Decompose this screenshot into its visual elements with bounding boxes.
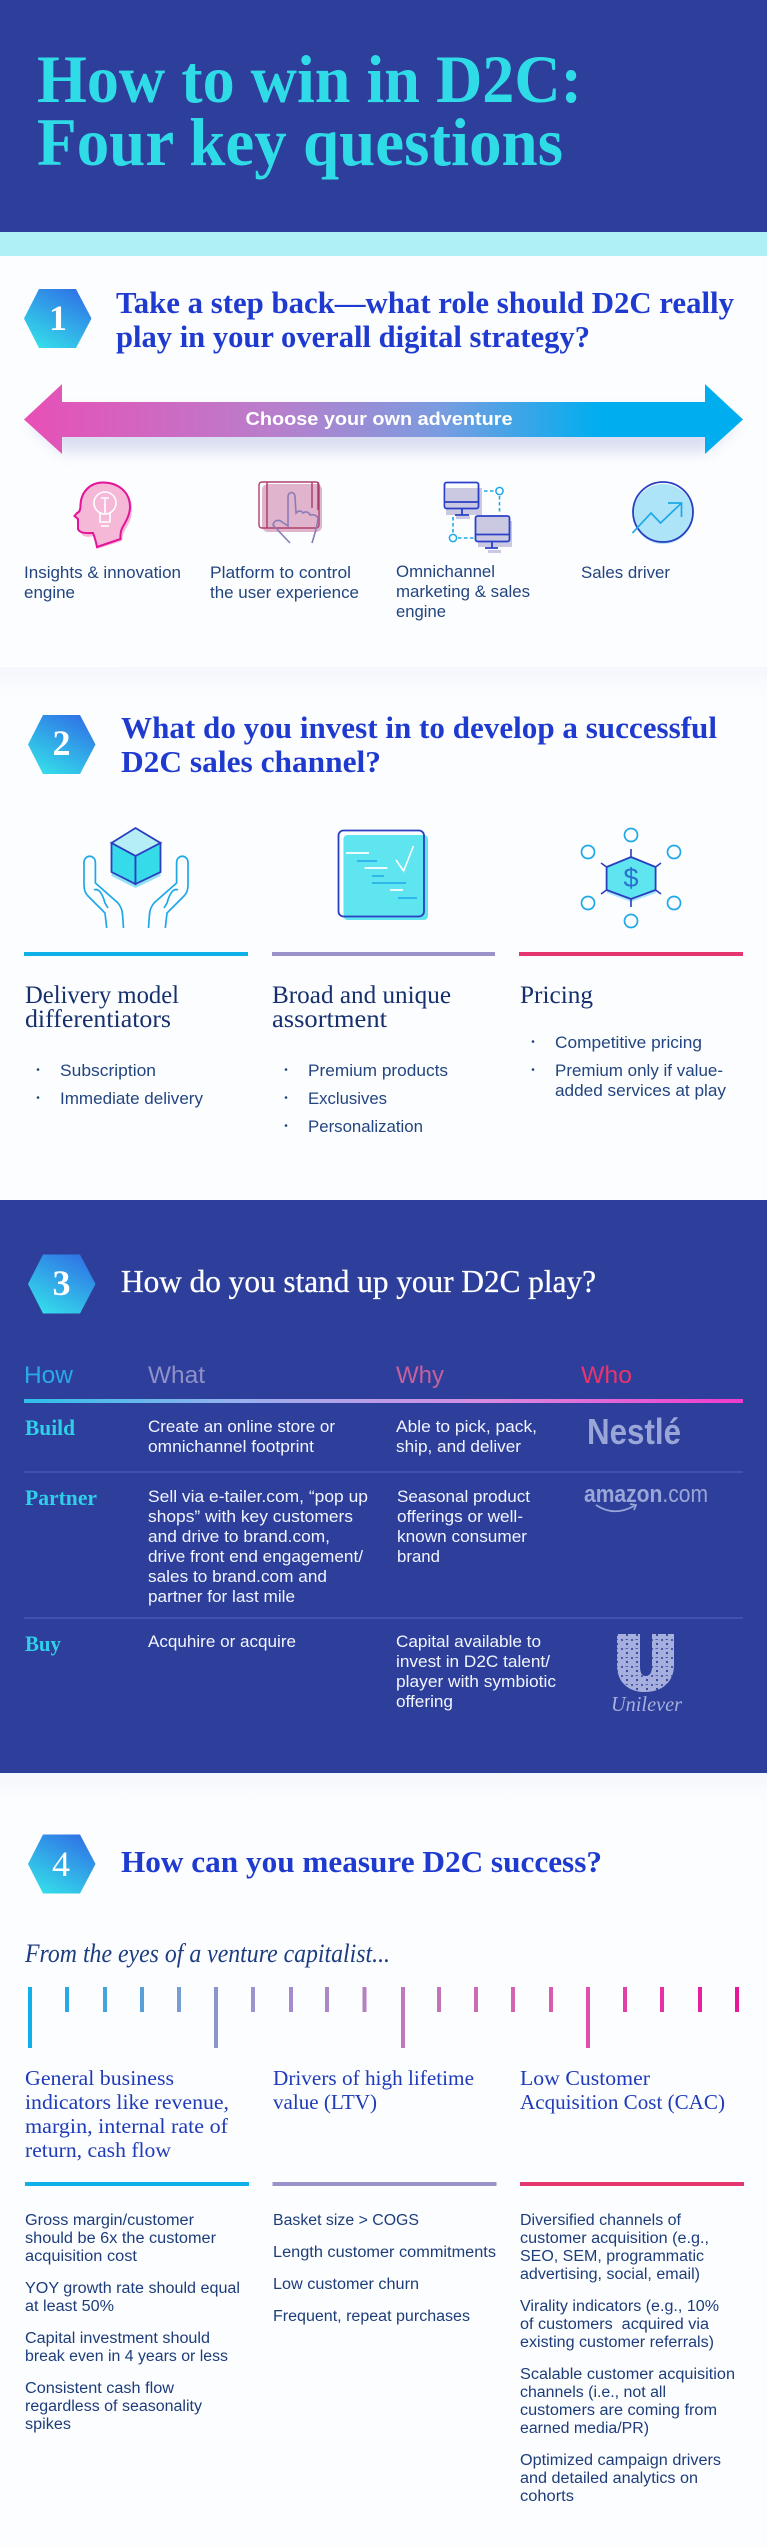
heading 3: How do you stand up your D2C play? <box>121 1263 596 1299</box>
row: partner <box>24 1481 743 1619</box>
heading 2: What do you invest in to develop a successful <box>121 710 717 745</box>
column: low CAC: Virality indicators (e.g., 10% <box>520 2298 719 2315</box>
row: partner: Partner <box>25 1485 97 1510</box>
header banner <box>0 0 767 256</box>
row: buy: offering <box>396 1693 453 1711</box>
number badge 4: 4 <box>52 1844 70 1884</box>
icon: head with lightbulb <box>74 482 132 549</box>
column: pricing: added services at play <box>555 1082 727 1100</box>
title: Four key questions <box>37 104 563 180</box>
number badge 1: 1 <box>49 298 67 338</box>
heading 1: play in your overall digital strategy? <box>116 319 590 354</box>
double-headed arrow: choose your own adventure <box>24 384 743 454</box>
column: general business indicators: General business <box>25 2066 174 2090</box>
row: partner: shops” with key customers <box>148 1508 353 1526</box>
panel: section 1 role of D2C <box>24 285 743 621</box>
icon: sales driver growth arrow <box>632 482 693 544</box>
row: partner: and drive to brand.com, <box>148 1528 330 1546</box>
column: broad and unique assortment: Personalization <box>308 1118 423 1136</box>
column: general business indicators: acquisition cost <box>25 2248 138 2265</box>
column: general business indicators: at least 50% <box>25 2298 114 2315</box>
table header row: Who <box>581 1362 632 1389</box>
column: low CAC: customer acquisition (e.g., <box>520 2230 709 2247</box>
number badge 2 <box>28 715 96 774</box>
row: build: omnichannel footprint <box>148 1438 314 1456</box>
column: low CAC: cohorts <box>520 2488 574 2505</box>
column: broad and unique assortment: Premium products <box>308 1062 448 1080</box>
labels: role options: engine <box>24 584 75 602</box>
column: low CAC: SEO, SEM, programmatic <box>520 2248 704 2265</box>
column: general business indicators: return, cash flow <box>25 2138 172 2162</box>
heading 1 <box>116 285 734 354</box>
icon: hands holding cube <box>84 828 188 928</box>
icon: checklist document <box>338 830 428 920</box>
column: low CAC <box>520 2066 744 2505</box>
labels: role options: marketing & sales <box>396 583 530 601</box>
row: buy <box>25 1631 683 1716</box>
panel: section 2 investments <box>0 667 767 1136</box>
column: low CAC: Low Customer <box>520 2066 650 2090</box>
number badge 4 <box>28 1834 96 1894</box>
labels: role options: Insights & innovation <box>24 564 181 582</box>
row: partner: brand <box>397 1548 440 1566</box>
number badge 2: 2 <box>52 723 70 763</box>
column: general business indicators: break even in 4 years or less <box>25 2348 228 2365</box>
column: delivery model differentiators: Subscription <box>60 1062 156 1080</box>
logo: Unilever: Unilever <box>611 1692 683 1716</box>
row: partner: sales to brand.com and <box>148 1568 327 1586</box>
labels: role options: engine <box>396 603 446 621</box>
column: general business indicators: regardless of seasonality <box>25 2398 202 2415</box>
column: drivers of LTV <box>272 2066 496 2325</box>
panel: section 4 measuring success <box>0 1773 767 2505</box>
column: general business indicators: should be 6x the customer <box>25 2230 216 2247</box>
labels: role options <box>24 563 671 621</box>
subtitle: From the eyes of a venture capitalist... <box>24 1939 390 1968</box>
column: low CAC: Optimized campaign drivers <box>520 2452 721 2469</box>
number badge 1 <box>24 289 92 348</box>
column: general business indicators <box>25 2066 249 2433</box>
column: low CAC: existing customer referrals) <box>520 2334 714 2351</box>
column: drivers of LTV: Low customer churn <box>273 2276 419 2293</box>
icon: hand tapping touchscreen <box>259 482 322 543</box>
row: buy: Acquhire or acquire <box>148 1633 296 1651</box>
row: partner: offerings or well- <box>397 1508 523 1526</box>
icon: connected monitors <box>444 482 512 553</box>
column: drivers of LTV: Drivers of high lifetime <box>273 2066 474 2090</box>
column: drivers of LTV: Frequent, repeat purchases <box>273 2308 470 2325</box>
column: general business indicators: YOY growth rate should equal <box>25 2280 240 2297</box>
column: delivery model differentiators <box>24 952 248 1108</box>
column: broad and unique assortment: Exclusives <box>308 1090 387 1108</box>
table header row: What <box>148 1362 205 1389</box>
icon: dollar hexagon network <box>582 828 680 928</box>
logo: Unilever <box>611 1634 683 1716</box>
column: low CAC: channels (i.e., not all <box>520 2384 666 2401</box>
row: buy: player with symbiotic <box>396 1673 556 1691</box>
column: pricing: Pricing <box>520 982 594 1009</box>
column: low CAC: customers are coming from <box>520 2402 717 2419</box>
row: partner: partner for last mile <box>148 1588 295 1606</box>
labels: role options: the user experience <box>210 584 359 602</box>
column: low CAC: and detailed analytics on <box>520 2470 698 2487</box>
title: How to win in D2C: <box>37 41 582 117</box>
column: low CAC: advertising, social, email) <box>520 2266 700 2283</box>
row: build: Build <box>25 1415 75 1440</box>
column: general business indicators: spikes <box>25 2416 71 2433</box>
column: low CAC: Diversified channels of <box>520 2212 682 2229</box>
labels: role options: Sales driver <box>581 564 671 582</box>
labels: role options: Platform to control <box>210 564 351 582</box>
table header row <box>24 1362 743 1403</box>
column: pricing: Premium only if value- <box>555 1062 723 1080</box>
tick scale <box>30 1987 737 2048</box>
row: partner: Sell via e-tailer.com, “pop up <box>148 1488 368 1506</box>
title <box>37 41 582 180</box>
column: delivery model differentiators: Delivery model <box>25 982 179 1009</box>
column: low CAC: of customers acquired via <box>520 2316 709 2333</box>
row: buy: Buy <box>25 1631 61 1656</box>
column: broad and unique assortment: assortment <box>272 1006 387 1033</box>
row: partner: known consumer <box>397 1528 528 1546</box>
logo: Nestlé: Nestlé <box>587 1411 681 1452</box>
row: partner: drive front end engagement/ <box>148 1548 363 1566</box>
row: buy: invest in D2C talent/ <box>396 1653 550 1671</box>
logo: amazon.com: amazon.com <box>584 1481 708 1508</box>
labels: role options: Omnichannel <box>396 563 495 581</box>
heading 1: Take a step back—what role should D2C really <box>116 285 734 320</box>
column: broad and unique assortment <box>272 952 495 1136</box>
column: delivery model differentiators: differentiators <box>25 1006 171 1033</box>
column: general business indicators: Capital investment should <box>25 2330 210 2347</box>
number badge 3: 3 <box>52 1263 70 1303</box>
column: drivers of LTV: Length customer commitments <box>273 2244 496 2261</box>
double-headed arrow: choose your own adventure: Choose your own adventure <box>246 409 512 429</box>
icon: dollar hexagon network: $ <box>623 863 639 893</box>
heading 2: D2C sales channel? <box>121 744 381 779</box>
column: low CAC: earned media/PR) <box>520 2420 649 2437</box>
row: build: ship, and deliver <box>396 1438 522 1456</box>
column: general business indicators: indicators like revenue, <box>25 2090 229 2114</box>
column: general business indicators: Gross margin/customer <box>25 2212 194 2229</box>
row: build: Create an online store or <box>148 1418 336 1436</box>
row: build <box>24 1411 743 1473</box>
number badge 3 <box>28 1254 96 1314</box>
column: general business indicators: margin, internal rate of <box>25 2114 228 2138</box>
row: build: Able to pick, pack, <box>396 1418 537 1436</box>
table header row: Why <box>396 1362 444 1389</box>
heading 2 <box>121 710 717 779</box>
column: drivers of LTV: value (LTV) <box>273 2090 377 2114</box>
column: low CAC: Scalable customer acquisition <box>520 2366 735 2383</box>
column: general business indicators: Consistent cash flow <box>25 2380 175 2397</box>
heading 4: How can you measure D2C success? <box>121 1844 602 1879</box>
column: drivers of LTV: Basket size > COGS <box>273 2212 419 2229</box>
row: partner: Seasonal product <box>397 1488 530 1506</box>
table header row: How <box>24 1362 74 1389</box>
column: pricing <box>519 952 743 1100</box>
column: pricing: Competitive pricing <box>555 1034 702 1052</box>
column: delivery model differentiators: Immediate delivery <box>60 1090 204 1108</box>
row: buy: Capital available to <box>396 1633 541 1651</box>
column: broad and unique assortment: Broad and unique <box>272 982 451 1009</box>
panel: section 3 how to stand up D2C <box>0 1200 767 2505</box>
column: low CAC: Acquisition Cost (CAC) <box>520 2090 725 2114</box>
